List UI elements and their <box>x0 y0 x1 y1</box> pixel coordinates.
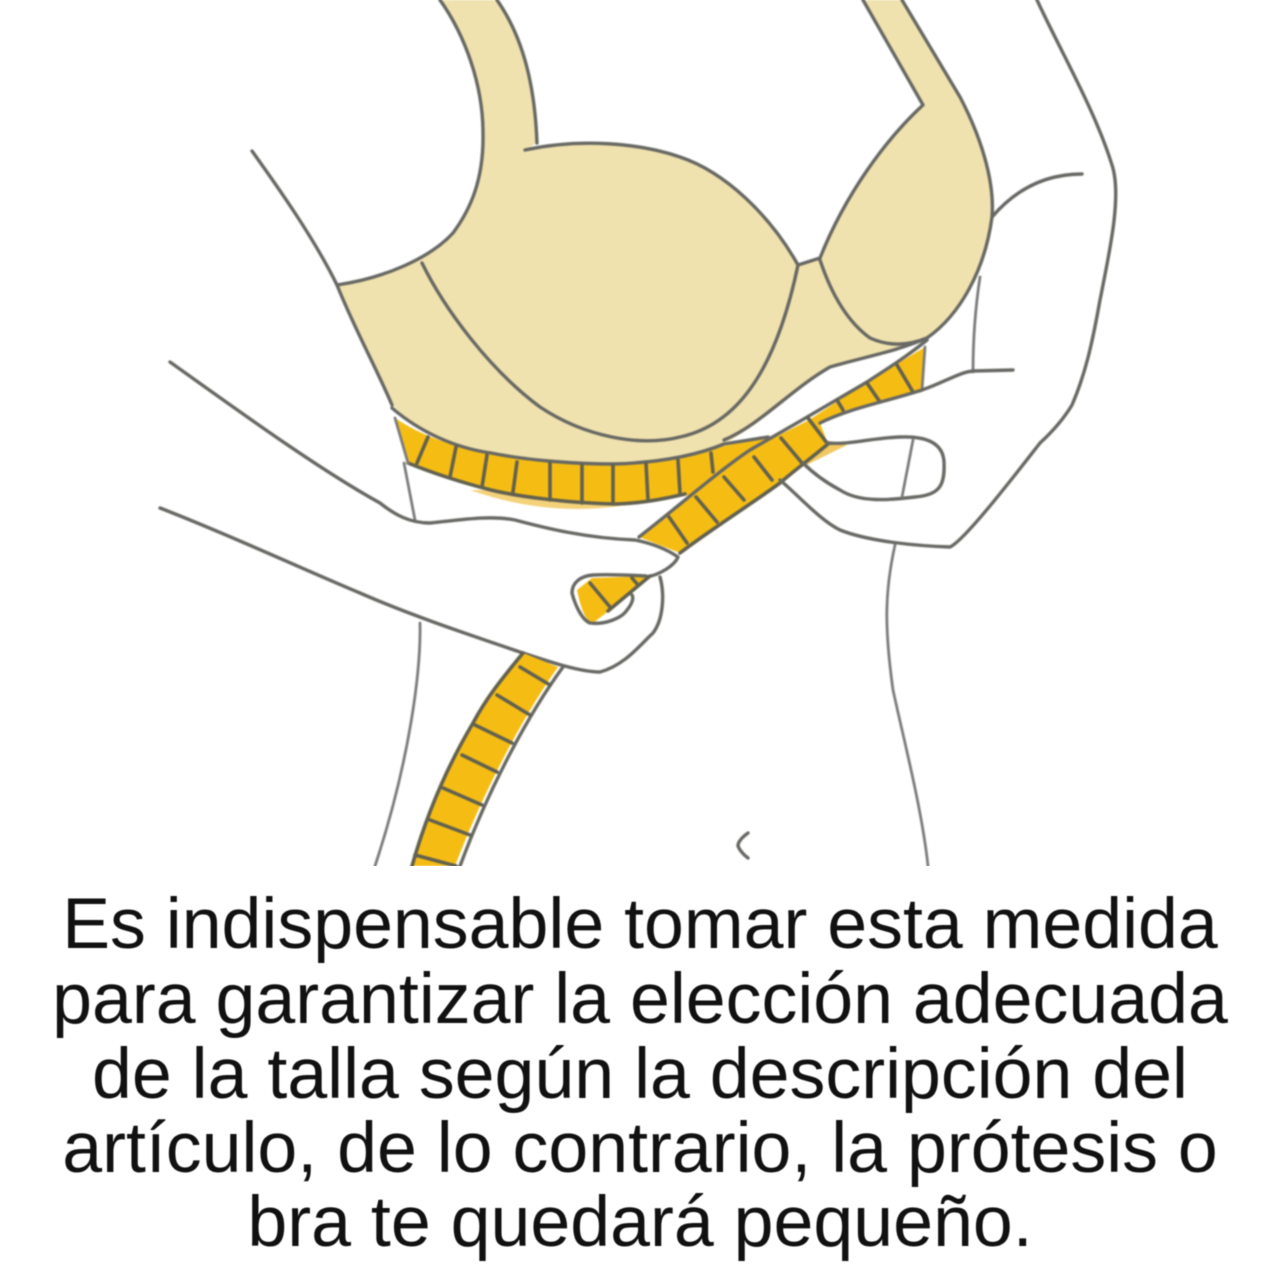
left hand and tape end <box>160 362 678 672</box>
tape ticks <box>669 365 913 543</box>
body outline <box>252 0 1116 866</box>
caption text: artículo, de lo contrario, la prótesis o <box>62 1108 1218 1188</box>
tape ticks <box>415 667 550 866</box>
bra <box>337 0 992 464</box>
caption text: bra te quedará pequeño. <box>247 1182 1033 1262</box>
tape tip <box>572 575 650 623</box>
tape measure: diagonal band <box>639 340 927 553</box>
caption text <box>52 884 1228 1262</box>
tape ticks <box>417 437 713 504</box>
strap and armhole lines <box>337 0 992 405</box>
tape measure: hanging end <box>412 653 563 866</box>
illustration: measuring the band under the bust <box>160 0 1116 866</box>
caption text: para garantizar la elección adecuada <box>52 959 1228 1039</box>
right hand <box>780 370 1040 547</box>
tape measure: horizontal band <box>392 408 768 509</box>
caption text: de la talla según la descripción del <box>92 1034 1188 1114</box>
cup seams <box>422 143 927 441</box>
caption text: Es indispensable tomar esta medida <box>62 884 1218 964</box>
